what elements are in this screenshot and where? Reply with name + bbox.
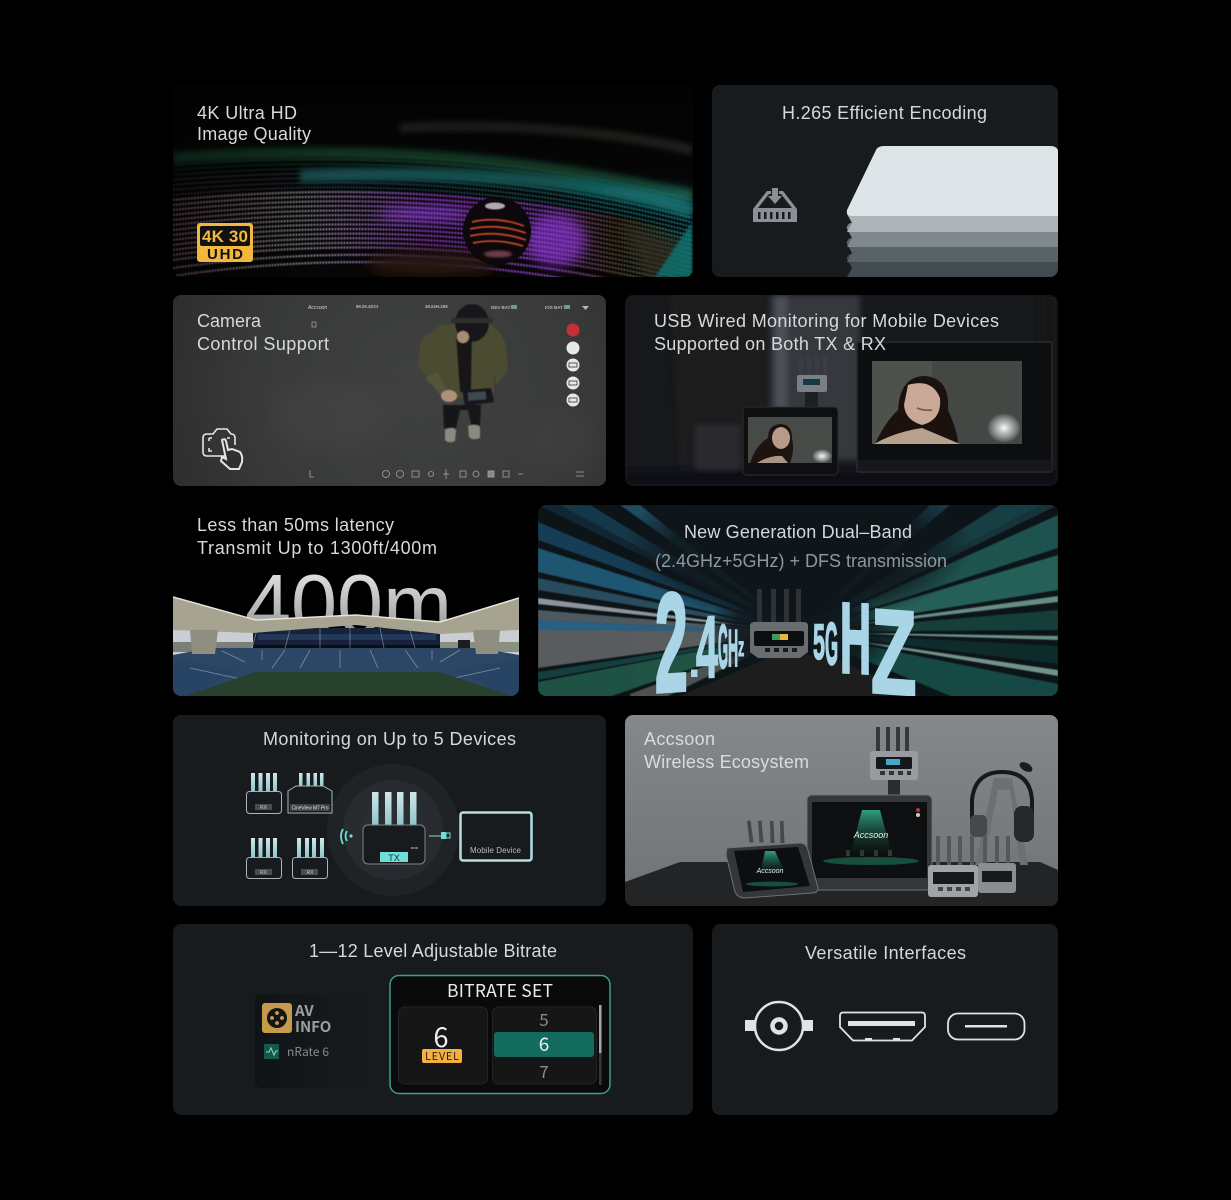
heading: Supported on Both TX & RX [654, 334, 886, 354]
RX device 3: RX [260, 870, 268, 876]
heading: H.265 Efficient Encoding [782, 103, 987, 123]
interface status bar [307, 304, 589, 327]
speed rays [538, 505, 1058, 696]
mobile device: Mobile Device [470, 846, 522, 855]
two receivers [928, 836, 1016, 897]
CineView M7 Pro [288, 773, 332, 813]
heading [197, 311, 329, 354]
AV info menu: AV [294, 1000, 314, 1021]
person with tablet [418, 304, 508, 442]
icon: wireless signal [341, 829, 353, 844]
bitrate set dialog: LEVEL [425, 1048, 459, 1064]
heading: (2.4GHz+5GHz) + DFS transmission [655, 551, 947, 571]
heading: USB Wired Monitoring for Mobile Devices [654, 311, 999, 331]
stadium photo [173, 597, 519, 696]
text 2.4GHz in perspective: G [718, 612, 728, 682]
bitrate set dialog: BITRATE SET [447, 978, 553, 1003]
heading: Image Quality [197, 124, 311, 144]
transmitter TX [363, 792, 425, 864]
USB connector [429, 832, 450, 839]
mobile device [460, 812, 532, 860]
AV info menu: INFO [295, 1016, 331, 1037]
table [625, 862, 1058, 906]
text 5GHz in perspective [813, 602, 916, 696]
RX device 1 [246, 773, 282, 814]
road floor [680, 655, 920, 696]
RX device 1: RX [260, 805, 268, 811]
bitrate set dialog: 6 [539, 1030, 549, 1057]
text 5GHz in perspective: Z [871, 585, 916, 722]
tablet with green stage [807, 795, 932, 890]
badge: 4K 30 UHD: 4K 30 [202, 227, 248, 246]
icon: HDMI port [840, 1012, 925, 1040]
interface side buttons [566, 324, 580, 406]
bitrate set dialog: 7 [539, 1058, 549, 1083]
panel: dual-band transmission [538, 505, 1058, 696]
tablet monitor [743, 407, 838, 475]
top transmitter [870, 727, 918, 795]
badge: 4K 30 UHD [197, 223, 253, 263]
interface status bar: 4K24H.265 [425, 304, 448, 309]
big 400m: 400m [245, 558, 452, 653]
icon: camera with tap hand [203, 429, 242, 469]
heading: 4K Ultra HD [197, 103, 297, 123]
heading [644, 729, 809, 772]
badge: 4K 30 UHD: UHD [207, 246, 243, 263]
text 2.4GHz in perspective: z [738, 630, 744, 662]
panel: adjustable bitrate [173, 924, 693, 1115]
RX device 4 [292, 838, 328, 878]
bitrate set dialog: 6 [434, 1016, 448, 1055]
panel: latency and range [173, 505, 519, 696]
interface status bar: IOS BAT [545, 305, 563, 310]
heading [654, 311, 999, 354]
heading: Versatile Interfaces [805, 943, 966, 963]
text 2.4GHz in perspective: 4 [696, 598, 718, 697]
heading [197, 103, 311, 144]
heading [655, 522, 947, 571]
heading: Wireless Ecosystem [644, 752, 809, 772]
text 5GHz in perspective: H [840, 582, 871, 696]
headset on stand [970, 760, 1034, 865]
signal rings [343, 780, 443, 880]
icon: compression tray [753, 188, 797, 222]
heading: New Generation Dual–Band [684, 522, 912, 542]
heading [197, 515, 437, 558]
studio backdrop [625, 295, 1058, 486]
text 5GHz in perspective: G [825, 611, 838, 678]
center dark vignette [634, 506, 962, 666]
text 2.4GHz in perspective: . [688, 633, 701, 689]
interface bottom toolbar [310, 469, 584, 479]
panel: camera control support [173, 295, 606, 486]
AV info menu: nRate 6 [287, 1043, 329, 1060]
small monitor with antennas [726, 820, 818, 898]
heading: Camera [197, 311, 262, 331]
bitrate set dialog: 5 [539, 1006, 549, 1031]
panel: H.265 encoding [712, 85, 1058, 277]
panel: 4K Ultra HD image quality [173, 106, 693, 277]
heading: Less than 50ms latency [197, 515, 394, 535]
icon: USB-C port [948, 1014, 1024, 1040]
heading: Accsoon [644, 729, 715, 749]
small monitor with antennas: Accsoon [756, 868, 784, 875]
text 2.4GHz in perspective: H [728, 621, 738, 678]
panel: wireless ecosystem [625, 715, 1058, 906]
panel: USB wired monitoring [625, 295, 1058, 486]
transmitter TX: TX [388, 853, 400, 863]
interface status bar: Accsoon [307, 305, 327, 311]
large monitor [857, 342, 1052, 472]
heading: 1—12 Level Adjustable Bitrate [309, 941, 557, 961]
bitrate set dialog [390, 976, 610, 1094]
panel: versatile interfaces [712, 924, 1058, 1115]
icon: BNC connector [745, 1002, 813, 1050]
transmitter device [750, 589, 808, 658]
AV info menu [255, 994, 395, 1088]
interface status bar: 8K25.4DCI [356, 304, 378, 309]
transmitter on mount [797, 375, 827, 406]
panel: monitoring on up to 5 devices [173, 715, 606, 906]
RX device 4: RX [307, 870, 314, 876]
heading: Monitoring on Up to 5 Devices [263, 729, 516, 749]
interface status bar: DEV BAT [491, 305, 511, 310]
tablet with green stage: Accsoon [853, 830, 888, 840]
CineView M7 Pro: CineView M7 Pro [292, 806, 329, 812]
heading: Control Support [197, 334, 329, 354]
text 2.4GHz in perspective [656, 591, 744, 694]
RX device 3 [246, 838, 282, 878]
text 5GHz in perspective: 5 [813, 615, 825, 671]
text 2.4GHz in perspective: 2 [655, 563, 688, 722]
water droplet [463, 197, 531, 265]
heading: Transmit Up to 1300ft/400m [197, 538, 437, 558]
stacked layers graphic [847, 146, 1058, 277]
